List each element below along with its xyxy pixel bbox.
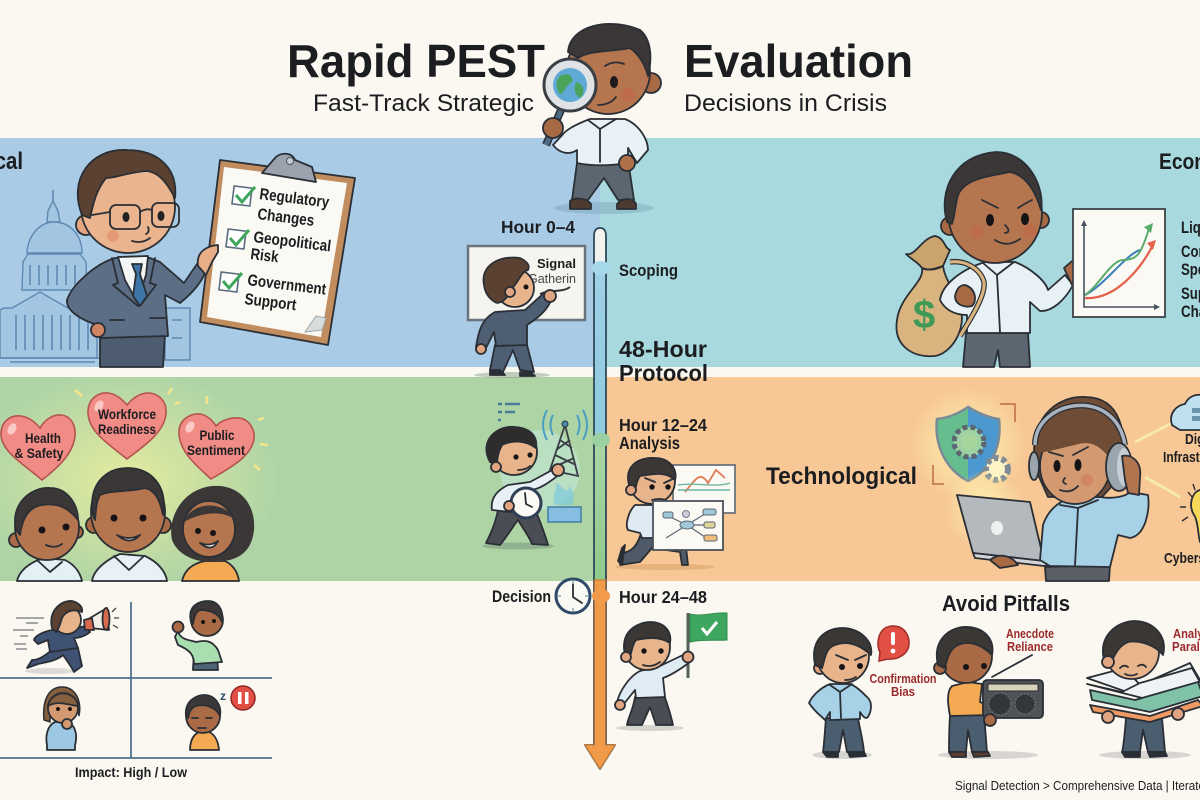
icon: alert bubble — [878, 626, 909, 661]
panel: social band — [0, 377, 600, 581]
icon: signal tower and network — [498, 404, 587, 522]
checkbox — [232, 186, 255, 206]
timeline title: 48-hour protocol: 48-Hour — [619, 336, 707, 362]
checklist text: Regulatory — [259, 186, 330, 212]
icon: heart Public Sentiment: Sentiment — [187, 443, 245, 458]
label: confirmation bias — [870, 671, 937, 699]
icon: analysis paralysis person with papers — [1087, 621, 1200, 759]
timeline label: decision: Decision — [492, 587, 551, 606]
icon: cloud server — [1171, 395, 1200, 430]
chart: 48-hour timeline arrow — [585, 228, 615, 769]
timeline label: hour 24-48: Hour 24–48 — [619, 587, 707, 607]
timeline label: hour 0-4: Hour 0–4 — [501, 217, 575, 237]
icon: mind map board — [653, 501, 723, 550]
timeline label: hour 12-24 analysis: Analysis — [619, 433, 680, 453]
checklist text: Support — [244, 291, 298, 314]
icon: economic analyst with money bag — [896, 152, 1082, 367]
icon: heart Workforce Readiness: Readiness — [98, 422, 156, 437]
icon: pause sign — [231, 686, 255, 710]
icon: sleeping person: z — [220, 689, 226, 703]
icon: heart Public Sentiment: Public — [200, 428, 235, 443]
icon: central analyst with magnifying glass — [543, 24, 661, 214]
timeline title: 48-hour protocol: Protocol — [619, 360, 708, 386]
icon: waving person — [172, 601, 223, 670]
icon: person at whiteboard — [474, 257, 556, 378]
icon: whiteboard signal gathering: Signal — [537, 256, 576, 271]
label: confirmation bias: Bias — [891, 684, 915, 699]
heart sparks — [75, 388, 268, 470]
icon: whiteboard signal gathering — [468, 246, 585, 320]
heading: Technological: Technological — [766, 463, 917, 490]
icon: light bulb — [1180, 484, 1200, 542]
checklist text — [244, 186, 332, 314]
checkbox — [226, 229, 249, 249]
node: decision — [592, 589, 610, 603]
icon: political analyst in suit — [67, 150, 205, 367]
icon: analysis charts — [673, 465, 735, 513]
title: Evaluation — [684, 35, 913, 87]
checklist text: Changes — [257, 206, 315, 230]
timeline label: scoping: Scoping — [619, 261, 678, 280]
checklist text: Risk — [250, 246, 279, 266]
icon: heart Health and Safety: & Safety — [14, 446, 64, 461]
icon: shield and gears — [910, 387, 1026, 503]
economic list text — [1181, 219, 1200, 321]
panel: technological band — [600, 377, 1200, 581]
icon: decision clock — [556, 579, 590, 613]
icon: capitol building — [0, 190, 190, 362]
label: anecdote reliance: Reliance — [1007, 639, 1053, 654]
node: scoping — [592, 261, 610, 275]
icon: economic analyst with money bag: $ — [913, 293, 935, 337]
icon: thinking woman — [44, 687, 80, 750]
icon: heart Public Sentiment — [179, 414, 254, 479]
icon: social person two — [86, 468, 171, 581]
icon: laptop — [945, 470, 1087, 566]
icon: person with clock — [482, 427, 564, 550]
digital infrastructure label — [1163, 431, 1200, 466]
title: Rapid PEST — [287, 35, 545, 87]
icon: clipboard checklist — [200, 154, 355, 345]
timeline title: 48-hour protocol — [619, 336, 708, 386]
timeline label: hour 12-24 analysis: Hour 12–24 — [619, 415, 707, 435]
icon: person with green flag — [615, 613, 727, 731]
icon: whiteboard signal gathering: Gatherin — [528, 272, 576, 286]
social glow — [0, 370, 280, 590]
icon: running person with megaphone — [13, 601, 119, 674]
checklist text: Geopolitical — [253, 229, 332, 255]
icon: heart Workforce Readiness — [88, 393, 166, 459]
icon: heart Health and Safety — [1, 415, 75, 480]
subtitle: Decisions in Crisis — [684, 90, 887, 117]
label: anecdote reliance — [1006, 626, 1054, 654]
subtitle — [313, 90, 887, 117]
icon: sleeping person — [186, 689, 226, 750]
subtitle: Fast-Track Strategic — [313, 90, 534, 117]
panel: political band — [0, 138, 600, 367]
icon: anecdote reliance person with radio — [934, 627, 1043, 759]
checklist text: Government — [247, 272, 328, 299]
chart: growth lines — [1073, 209, 1165, 317]
node: analysis — [592, 433, 610, 447]
icon: heart Workforce Readiness: Workforce — [98, 407, 156, 422]
icon: person running with board — [615, 458, 715, 570]
checkbox — [219, 272, 242, 292]
label: analysis paralysis — [1172, 626, 1200, 654]
chart: priority matrix — [0, 601, 272, 758]
icon: social person one — [9, 488, 83, 581]
icon: social person three — [171, 486, 254, 581]
icon: technologist with headphones — [990, 397, 1148, 581]
label: confirmation bias: Confirmation — [870, 671, 937, 686]
icon: connector lines — [1135, 423, 1180, 497]
heading: Avoid Pitfalls: Avoid Pitfalls — [942, 591, 1070, 616]
icon: hand holding clipboard — [198, 245, 218, 275]
title — [287, 35, 913, 87]
matrix axis label: Impact: High / Low — [75, 765, 187, 780]
label: anecdote reliance: Anecdote — [1006, 626, 1054, 641]
panel: economic band — [600, 138, 1200, 367]
icon: heart Health and Safety: Health — [25, 431, 61, 446]
icon: confirmation bias person — [809, 628, 872, 759]
timeline label: hour 12-24 analysis — [619, 415, 707, 453]
